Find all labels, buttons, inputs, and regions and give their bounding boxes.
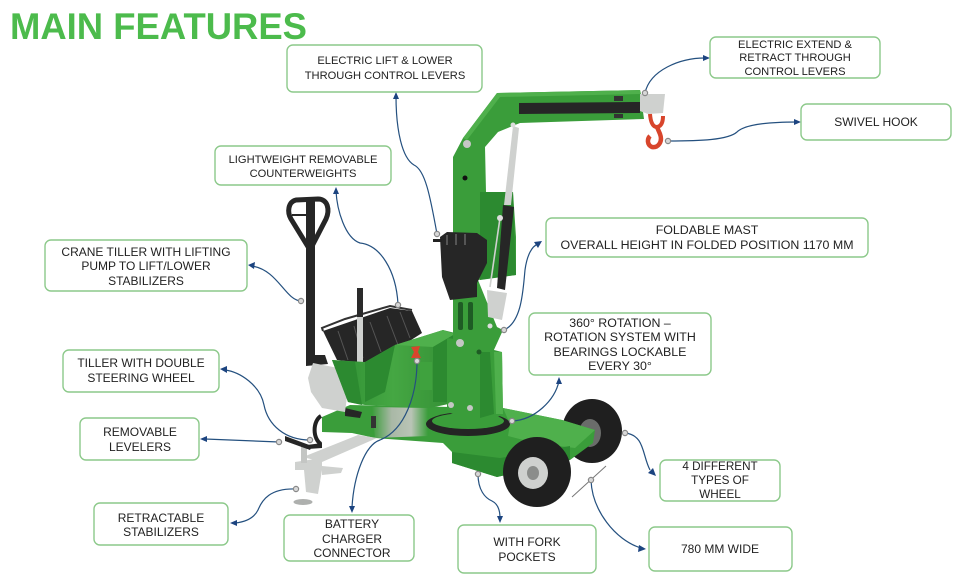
callout: four wheel types: WHEEL: [699, 488, 741, 501]
counterweights: [322, 288, 422, 371]
connector: 360 rotation: [509, 377, 562, 424]
callout: fork pockets: WITH FORK: [493, 535, 561, 549]
control wheel: [315, 416, 321, 444]
connector: foldable mast: [501, 241, 542, 333]
callout: foldable mast: [546, 218, 868, 257]
callout: retractable stabilizers: [94, 503, 228, 545]
front wheel: [503, 437, 571, 507]
tiller handle: [289, 199, 328, 366]
callout: four wheel types: TYPES OF: [691, 474, 749, 487]
front rail and stabilizer: [285, 435, 377, 505]
connector: four wheel types: [622, 430, 656, 476]
connector: 780 mm wide: [588, 477, 646, 552]
callout: 360 rotation: EVERY 30°: [588, 359, 652, 373]
callout: electric extend and retract: [710, 37, 880, 78]
callout: retractable stabilizers: STABILIZERS: [123, 525, 199, 539]
connector: fork pockets: [475, 471, 503, 523]
callout: lightweight counterweights: COUNTERWEIGHTS: [250, 168, 356, 180]
callout: battery charger connector: CONNECTOR: [313, 546, 391, 560]
callout: electric lift and lower: [287, 45, 482, 92]
title: MAIN FEATURES: [10, 6, 307, 47]
connector: tiller with double steering wheel: [220, 366, 313, 443]
callout: battery charger connector: CHARGER: [322, 532, 382, 546]
connector: retractable stabilizers: [230, 486, 299, 526]
callout: 360 rotation: 360° ROTATION –: [569, 316, 671, 330]
callout: retractable stabilizers: RETRACTABLE: [118, 511, 204, 525]
hook head: [640, 94, 665, 147]
callout: electric extend and retract: ELECTRIC EXTEND &: [738, 39, 853, 51]
callout: foldable mast: FOLDABLE MAST: [656, 223, 759, 237]
pedestal: [447, 338, 503, 423]
callout: foldable mast: OVERALL HEIGHT IN FOLDED POSITION 1170 MM: [560, 238, 854, 252]
mast: [453, 90, 644, 352]
callout: battery charger connector: BATTERY: [325, 517, 379, 531]
connector: battery charger: [349, 358, 420, 513]
connector: crane tiller: [248, 262, 304, 304]
callout: electric lift and lower: ELECTRIC LIFT & LOWER: [317, 55, 453, 67]
callout: lightweight counterweights: [215, 146, 391, 185]
callout: removable levelers: [80, 418, 199, 460]
connector: lightweight counterweights: [333, 187, 401, 308]
callout: fork pockets: [458, 525, 596, 573]
callout: swivel hook: SWIVEL HOOK: [834, 115, 918, 129]
callout: removable levelers: LEVELERS: [109, 440, 171, 454]
red charger connector: [411, 346, 421, 358]
callout: 360 rotation: ROTATION SYSTEM WITH: [544, 330, 696, 344]
callout: crane tiller: [45, 240, 247, 291]
callout: tiller with double steering wheel: STEERING WHEEL: [87, 371, 195, 385]
tiller body: [308, 363, 347, 412]
rotation ring: [426, 412, 510, 436]
callout: electric extend and retract: CONTROL LEVERS: [744, 66, 846, 78]
crane illustration: [285, 90, 665, 507]
connector: swivel hook: [665, 119, 801, 144]
callout: 360 rotation: [529, 313, 711, 375]
callout: battery charger connector: [284, 515, 414, 561]
callout: 780 mm wide: 780 MM WIDE: [681, 542, 759, 556]
rear wheel: [562, 399, 622, 463]
callout: lightweight counterweights: LIGHTWEIGHT REMOVABLE: [229, 154, 377, 166]
callout: 780 mm wide: [649, 527, 792, 571]
callout: four wheel types: [660, 460, 780, 501]
callout: electric extend and retract: RETRACT THROUGH: [739, 52, 851, 64]
connector: removable levelers: [200, 436, 282, 445]
callout: tiller with double steering wheel: TILLER WITH DOUBLE: [77, 356, 205, 370]
width dimension line: [572, 466, 606, 497]
callout: fork pockets: POCKETS: [498, 550, 556, 564]
callout: swivel hook: [801, 104, 951, 140]
hopper body: [332, 330, 455, 408]
callout: 360 rotation: BEARINGS LOCKABLE: [554, 345, 686, 359]
hydraulic cylinder: [487, 122, 519, 328]
callout: electric lift and lower: THROUGH CONTROL LEVERS: [305, 70, 465, 82]
control box: [433, 232, 487, 300]
callout: removable levelers: REMOVABLE: [103, 425, 177, 439]
callout: tiller with double steering wheel: [63, 350, 219, 392]
callout: crane tiller: CRANE TILLER WITH LIFTING: [61, 245, 231, 259]
lower chassis: [322, 405, 595, 477]
connector: extend and retract: [642, 55, 710, 96]
callout: crane tiller: STABILIZERS: [108, 274, 184, 288]
connector: electric lift: [393, 92, 440, 237]
callout: crane tiller: PUMP TO LIFT/LOWER: [81, 259, 211, 273]
callout: four wheel types: 4 DIFFERENT: [682, 460, 758, 473]
